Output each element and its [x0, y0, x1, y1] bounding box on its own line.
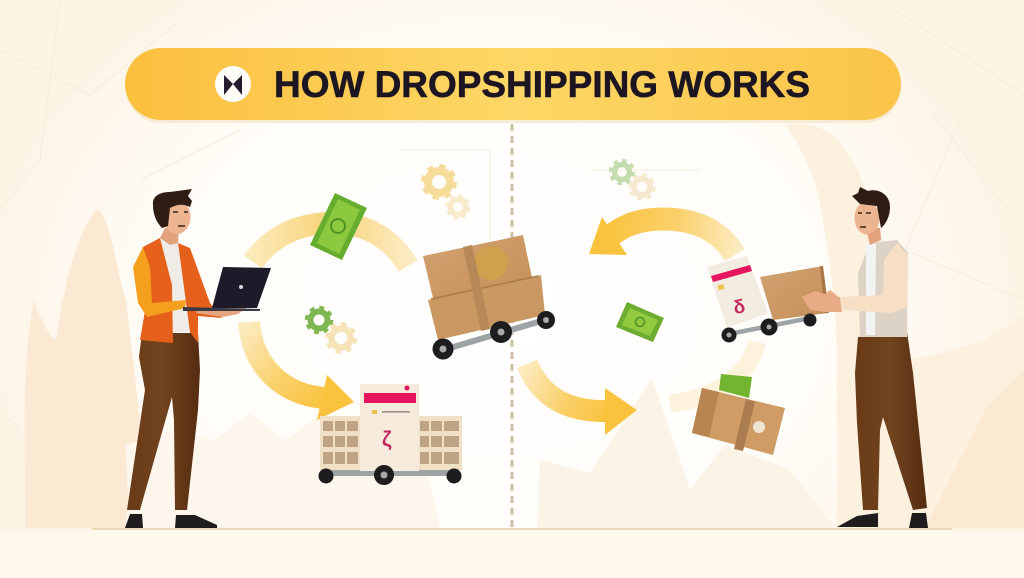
neck [866, 228, 881, 245]
hand and forearm [196, 304, 249, 317]
trolley bar [443, 319, 548, 350]
sleeve [133, 247, 186, 317]
eyes and mouth [858, 213, 871, 227]
upper box [423, 235, 532, 298]
shelf right [416, 416, 462, 470]
arrow: lower centre arc pointing right [527, 364, 637, 435]
face [164, 200, 190, 234]
cart bar [326, 470, 456, 476]
illustration: warehouse parcel on cart [318, 384, 462, 485]
trousers [855, 332, 927, 510]
parcel [692, 388, 785, 455]
illustration: label and parcel on trolley [707, 256, 829, 342]
shipping label: ζ [382, 428, 392, 451]
floor line [92, 528, 952, 530]
title banner [125, 48, 901, 123]
hair [852, 187, 890, 228]
jacket [140, 238, 222, 343]
divider: dashed centre line [510, 124, 514, 528]
title text: HOW DROPSHIPPING WORKS [274, 64, 810, 105]
vest [858, 240, 908, 337]
illustration: parcel with banknote [692, 374, 785, 455]
laptop [183, 267, 271, 311]
icon: logo badge [215, 66, 251, 102]
shirt [160, 238, 190, 332]
lower box [428, 275, 545, 340]
arrow: upper right arc pointing left [589, 217, 735, 255]
eyes and mouth [173, 212, 188, 226]
icon: banknote centre right [616, 302, 664, 342]
trousers [127, 333, 200, 510]
icon: gears top right [610, 160, 654, 199]
character: left man with laptop [125, 189, 271, 528]
arrow: upper left arc [253, 223, 408, 266]
icon: gears centre left [306, 308, 355, 352]
stamp [753, 421, 765, 433]
tape [463, 245, 490, 331]
box seam [431, 276, 538, 299]
wheels [318, 468, 334, 484]
sleeve [838, 243, 908, 313]
shipping label: δ [731, 296, 747, 319]
trolley bar [729, 318, 810, 334]
banknote [719, 374, 752, 398]
shelf left [320, 416, 362, 470]
icon: banknote top left [310, 193, 367, 260]
icon: gears top left [423, 166, 469, 218]
wheels [432, 338, 454, 360]
arrow: pale lower right arc [670, 342, 757, 404]
parcel [760, 266, 829, 320]
wheels [722, 328, 736, 342]
arrow: lower left arc to warehouse [249, 322, 354, 420]
neck [160, 228, 179, 245]
hair [153, 189, 192, 228]
shoes [837, 513, 878, 527]
hands [802, 290, 842, 312]
shirt [866, 243, 876, 335]
shoes [125, 514, 143, 528]
face [854, 202, 880, 234]
tape [734, 399, 755, 451]
shipping label [360, 384, 419, 471]
character: right man holding parcel [802, 187, 928, 528]
illustration: stacked boxes on trolley [423, 235, 555, 360]
